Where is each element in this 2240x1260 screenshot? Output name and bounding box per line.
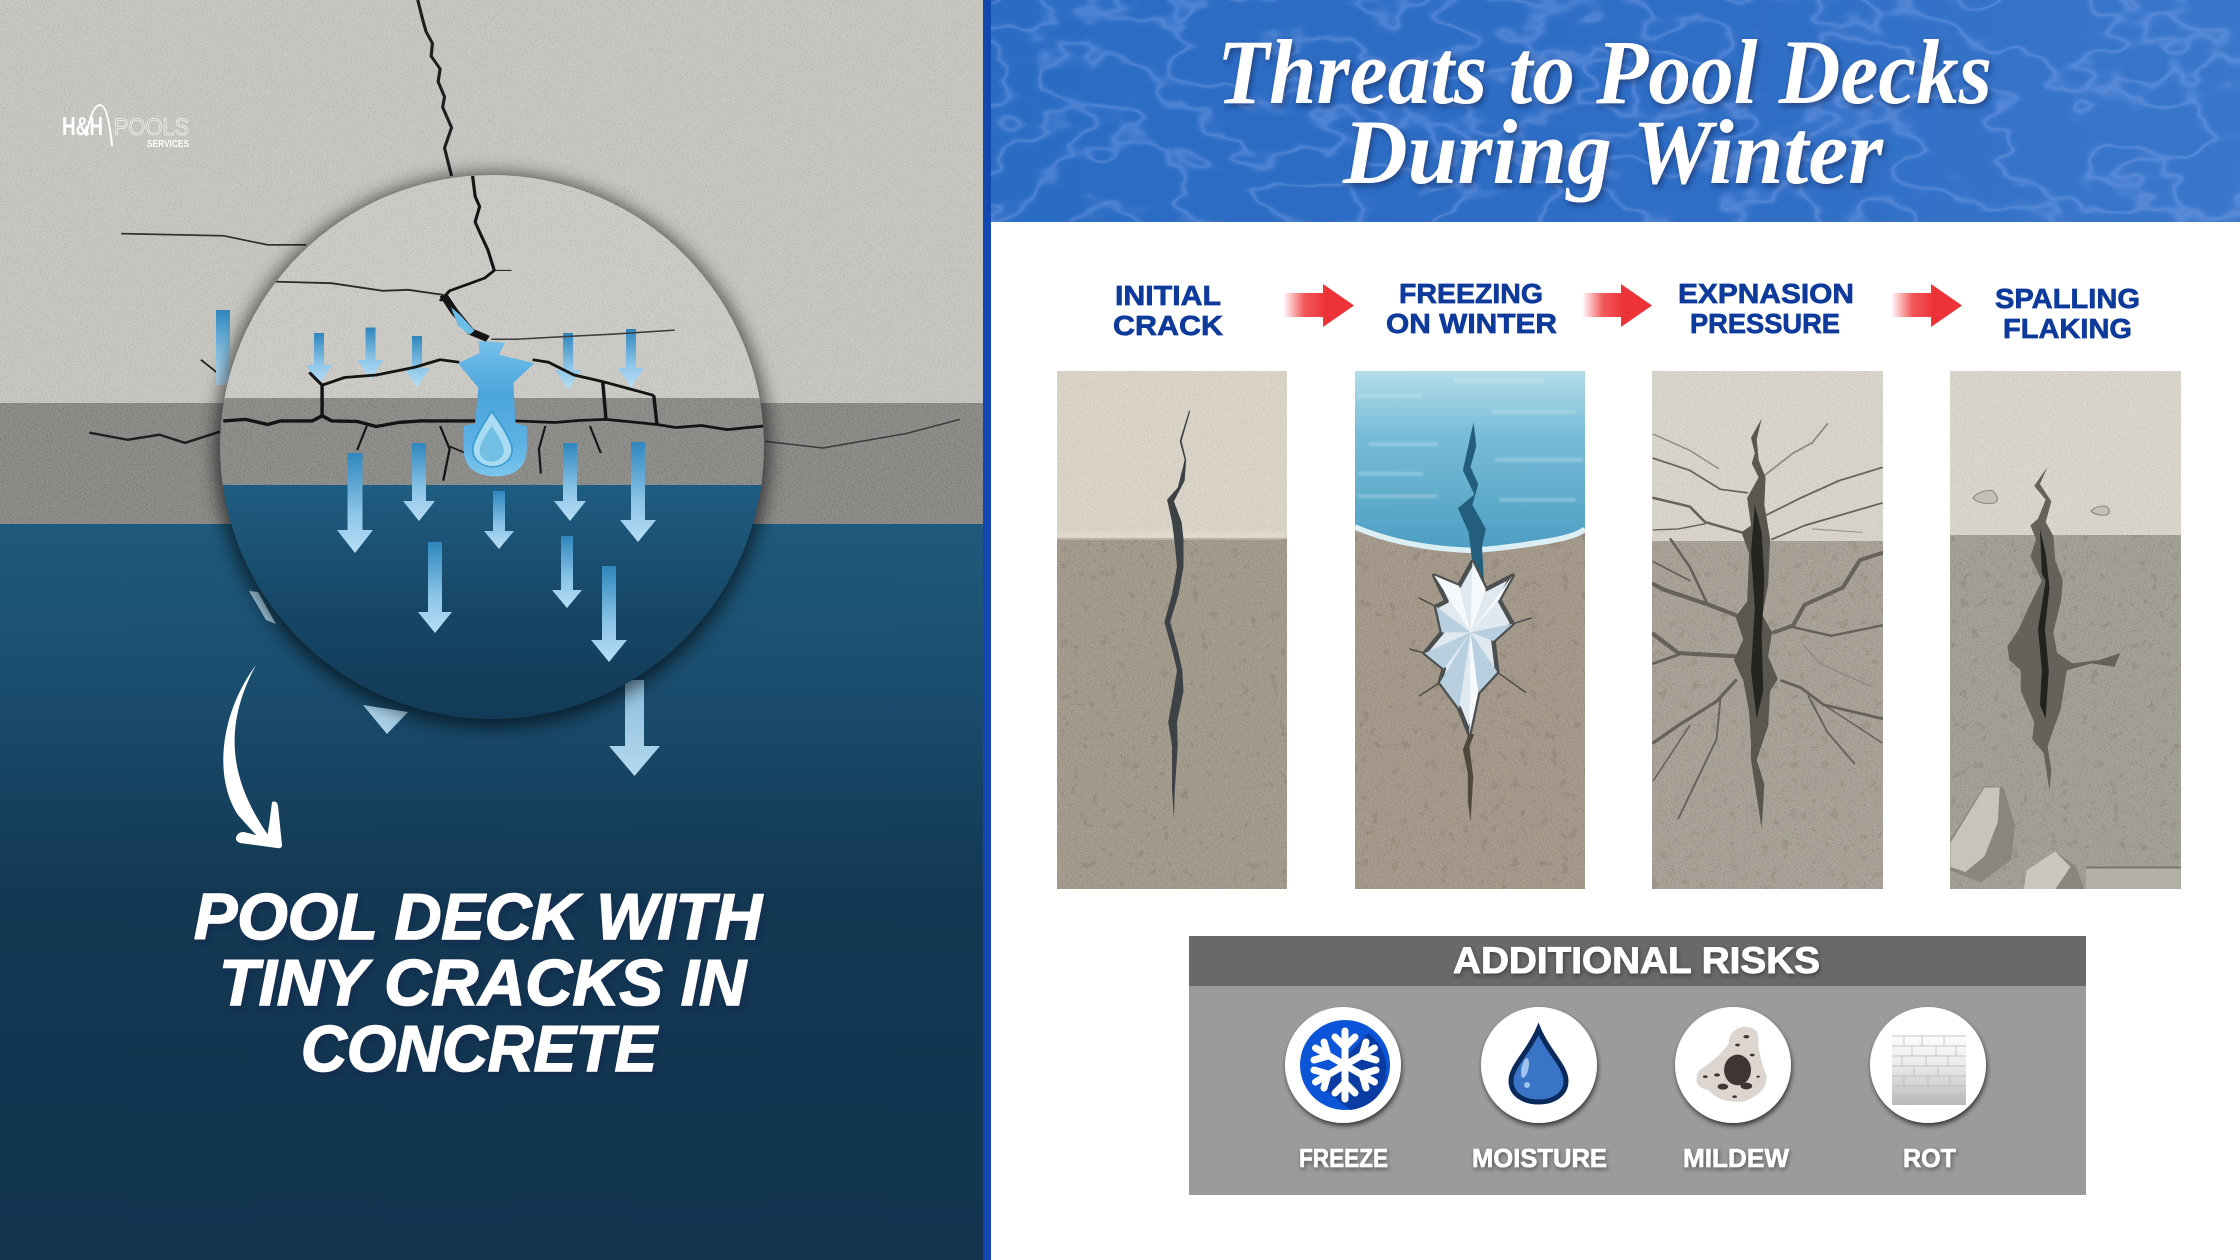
step heading: expansion pressure (1678, 278, 1854, 339)
icon labels: MILDEW (1683, 1143, 1789, 1173)
step heading: freezing on winter: FREEZING (1399, 278, 1543, 309)
ice crystal (1425, 562, 1513, 734)
logo: H&H Pools Services: H&H (62, 111, 103, 141)
water entering the crack (451, 307, 534, 477)
panel: additional risks (1189, 936, 2086, 1195)
step heading: initial crack (1113, 280, 1223, 341)
caption: pool deck with tiny cracks: POOL DECK WITH (194, 880, 764, 953)
arrow: step 3 to 4 (1891, 284, 1962, 327)
caption: pool deck with tiny cracks: TINY CRACKS IN (219, 946, 748, 1019)
caption: pool deck with tiny cracks: CONCRETE (301, 1012, 659, 1085)
icon: moisture (1481, 1007, 1597, 1123)
title: Threats to Pool Decks (1217, 21, 1992, 123)
panel: freezing illustration (1355, 371, 1585, 889)
icon labels: MOISTURE (1472, 1143, 1607, 1173)
water and ice edge (1355, 371, 1585, 550)
header banner (991, 0, 2240, 222)
crack through water (1458, 422, 1486, 581)
panel: pool deck cross-section (0, 0, 983, 1260)
step heading: expansion pressure: EXPNASION (1678, 278, 1854, 309)
step heading: freezing on winter (1386, 278, 1557, 339)
lower crack and hairlines (1463, 734, 1474, 822)
spall gash (2007, 467, 2120, 791)
icon labels (1299, 1143, 1956, 1173)
logo: H&H Pools Services (62, 105, 189, 150)
step heading: freezing on winter: ON WINTER (1386, 308, 1557, 339)
process step headings and arrows (1113, 278, 2140, 344)
icon: mildew (1675, 1007, 1791, 1123)
step heading: initial crack: CRACK (1113, 310, 1223, 341)
upper small arrows (306, 328, 644, 390)
caption: pool deck with tiny cracks (194, 880, 764, 1085)
logo: H&H Pools Services: SERVICES (147, 139, 189, 150)
divider strip (983, 0, 991, 1260)
logo: H&H Pools Services: POOLS (114, 114, 189, 141)
icon labels: ROT (1903, 1143, 1956, 1173)
step heading: spalling flaking: FLAKING (2003, 313, 2132, 344)
arrow: step 1 to 2 (1283, 284, 1354, 327)
magnifier circle (220, 175, 764, 719)
arrows outside the magnifier (216, 310, 660, 776)
step heading: spalling flaking: SPALLING (1995, 283, 2140, 314)
title: During Winter (1342, 101, 1884, 203)
icon: rot (1870, 1007, 1986, 1123)
title (1217, 21, 1992, 203)
heading: ADDITIONAL RISKS (1453, 940, 1820, 981)
central gash (1734, 419, 1778, 829)
branching cracks (1653, 424, 1882, 819)
step heading: spalling flaking (1995, 283, 2140, 344)
panel: spalling illustration (1950, 371, 2181, 889)
lower flow arrows (337, 442, 656, 662)
icon: freeze (1285, 1007, 1401, 1123)
curved callout arrow (223, 665, 282, 848)
icon labels: FREEZE (1299, 1143, 1388, 1173)
crack (1164, 410, 1190, 819)
crack network in the magnifier (223, 176, 763, 481)
panel: initial crack illustration (1057, 371, 1287, 889)
rubble (1950, 786, 2015, 882)
step heading: expansion pressure: PRESSURE (1690, 308, 1840, 339)
magnifier shadow (215, 173, 769, 727)
arrow: step 2 to 3 (1582, 284, 1652, 327)
panel: expansion pressure illustration (1652, 371, 1883, 889)
step heading: initial crack: INITIAL (1115, 280, 1221, 311)
cracks outside the magnifier (89, 0, 960, 448)
